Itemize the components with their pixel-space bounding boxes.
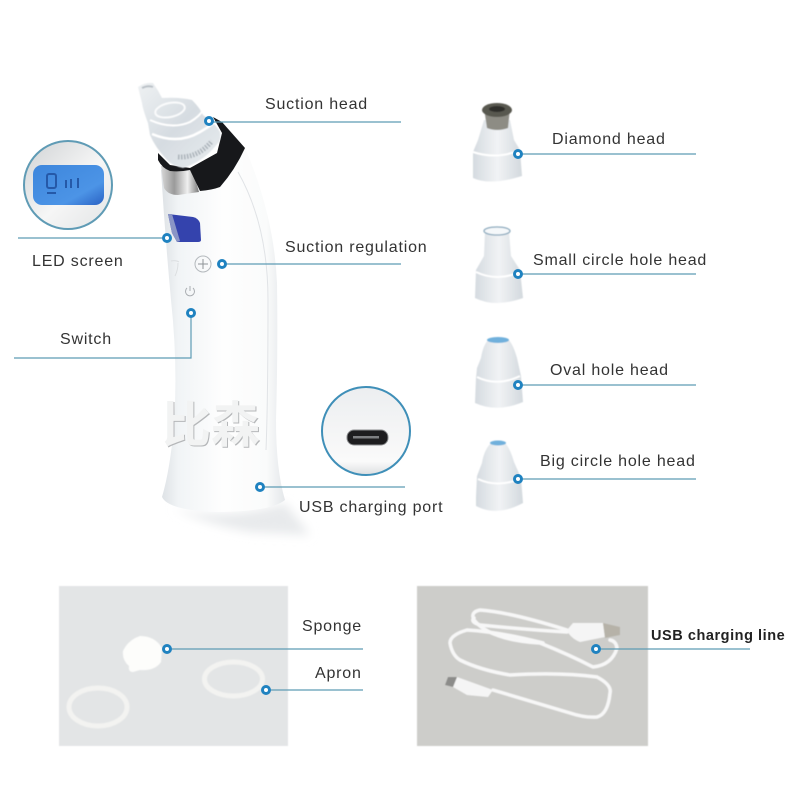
micro USB plug xyxy=(445,677,493,697)
callout dots xyxy=(164,118,600,694)
cable xyxy=(450,610,617,717)
replacement heads xyxy=(473,103,523,511)
labels xyxy=(32,96,785,682)
small circle hole head xyxy=(475,227,523,303)
labels: USB charging line xyxy=(651,628,785,644)
labels: Big circle hole head xyxy=(540,453,696,470)
plus button xyxy=(195,256,211,272)
panel: sponge and apron photo xyxy=(59,586,288,746)
apron ring right xyxy=(204,662,262,696)
sponge xyxy=(123,636,162,672)
LCD screen xyxy=(168,214,201,242)
oval hole head xyxy=(475,337,523,408)
device: blackhead remover xyxy=(138,83,310,535)
power button xyxy=(185,286,194,296)
diamond head xyxy=(473,103,522,182)
device shadow xyxy=(172,503,310,535)
watermark: 比森 xyxy=(163,387,261,458)
labels: Sponge xyxy=(302,618,362,635)
labels: USB charging port xyxy=(299,499,443,516)
labels: Switch xyxy=(60,331,112,348)
labels: Suction head xyxy=(265,96,368,113)
LED screen magnifier xyxy=(24,141,112,229)
USB plug xyxy=(567,623,620,642)
chrome ring xyxy=(161,166,199,195)
labels: Small circle hole head xyxy=(533,252,707,269)
black collar xyxy=(158,117,245,191)
labels: Apron xyxy=(315,665,362,682)
labels: Oval hole head xyxy=(550,362,669,379)
USB port magnifier xyxy=(322,387,410,475)
big circle hole head xyxy=(476,440,523,511)
watermark: 比森 xyxy=(162,386,260,457)
body seam xyxy=(238,172,268,450)
labels: Diamond head xyxy=(552,131,666,148)
apron ring left xyxy=(69,688,127,726)
device body xyxy=(161,148,285,512)
leader lines xyxy=(14,122,750,690)
panel: USB charging line photo xyxy=(417,586,648,746)
labels: Suction regulation xyxy=(285,239,428,256)
labels: LED screen xyxy=(32,253,124,270)
minus button xyxy=(171,261,179,276)
suction head xyxy=(138,83,220,168)
